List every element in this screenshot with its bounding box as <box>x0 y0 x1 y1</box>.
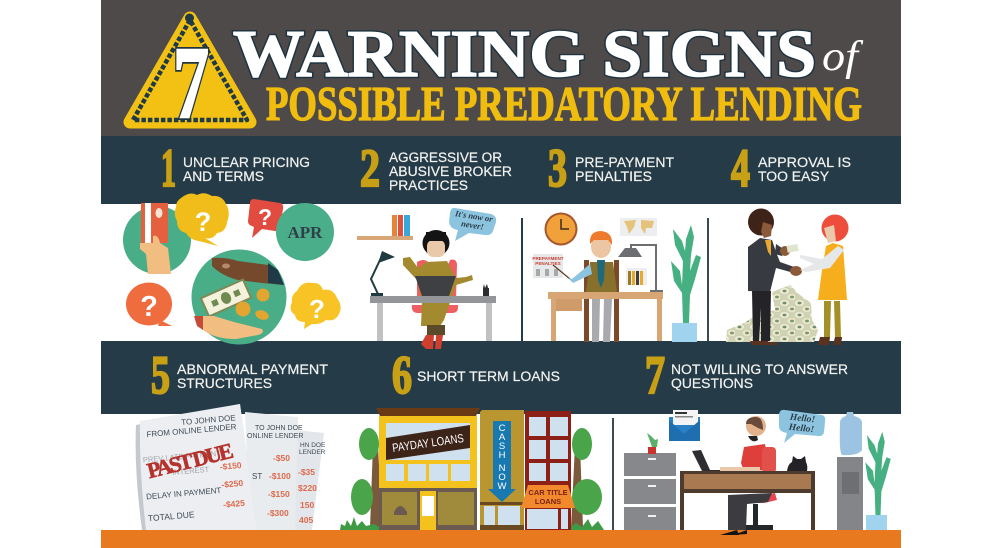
sign 6 label: SHORT TERM LOANS <box>417 369 560 384</box>
bill 1: -$150 <box>219 460 242 472</box>
icon: warning triangle with 7 <box>130 14 250 140</box>
speech bubble: hello hello <box>779 410 825 443</box>
world map <box>620 218 657 236</box>
illustration: unresponsive lender office <box>624 410 891 535</box>
bill 2: TO JOHN DOE <box>255 425 303 432</box>
bill 1: -$250 <box>221 478 244 490</box>
trees left <box>351 428 382 528</box>
sign 2 label: AGGRESSIVE OR <box>389 150 502 165</box>
icon: yellow question cloud right <box>291 283 341 329</box>
wall clock <box>544 212 578 246</box>
speech bubble: hello hello: Hello! <box>788 413 816 425</box>
water cooler <box>837 412 863 530</box>
speech bubble: it's now or never <box>449 208 496 241</box>
speech bubble: hello hello: Hello! <box>787 423 815 435</box>
sign 5 label: STRUCTURES <box>177 376 272 391</box>
divider <box>612 418 614 530</box>
grass left <box>340 517 384 530</box>
bill 1: DELAY IN PAYMENT <box>146 486 222 501</box>
laptop <box>415 276 456 296</box>
icon: cash exchange circle <box>192 250 286 344</box>
money pile <box>726 285 818 342</box>
bill 3: HN DOE <box>300 442 326 449</box>
building: cash now: N <box>499 463 506 474</box>
sign 4 number: 4 <box>731 138 750 198</box>
illustration: past due bills <box>136 404 326 530</box>
building: cash now: S <box>499 441 505 452</box>
bill 2: -$150 <box>268 489 290 499</box>
bill 2: -$300 <box>267 508 289 518</box>
man on the phone <box>720 416 776 535</box>
building: cash now <box>480 410 524 530</box>
sign 2 label: PRACTICES <box>389 178 468 193</box>
bill 1: PREV LATE PAYMENT <box>143 449 221 464</box>
penalties chart <box>532 254 564 278</box>
table lamp <box>618 245 663 292</box>
sign 2 label: ABUSIVE BROKER <box>389 164 512 179</box>
speech bubble: it's now or never: It's now or <box>454 208 494 224</box>
building: payday loans: PAYDAY LOANS <box>391 431 465 455</box>
icon: APR circle <box>276 203 334 261</box>
bill 2: ST <box>252 472 262 481</box>
building: car title loans <box>521 411 575 530</box>
illustration: aggressive broker at desk <box>357 208 496 349</box>
man in suit <box>748 208 802 345</box>
bill 3: 405 <box>299 515 313 525</box>
floor band <box>101 530 901 548</box>
bill 1: FROM ONLINE LENDER <box>146 422 237 439</box>
shelf with binders <box>357 215 413 240</box>
penalties chart: PREPAYMENT <box>532 256 564 261</box>
icon: yellow question cloud <box>175 193 229 246</box>
sign 1 number: 1 <box>161 138 176 198</box>
laptop <box>692 450 722 471</box>
sign 1 label: UNCLEAR PRICING <box>183 155 310 170</box>
sign 3 label: PENALTIES <box>575 169 652 184</box>
building: payday loans <box>376 408 480 530</box>
icon: orange question bubble: ? <box>140 291 158 323</box>
woman in yellow dress <box>800 214 848 345</box>
band: signs 1 to 4 <box>101 136 901 204</box>
sign 3 label: PRE-PAYMENT <box>575 155 674 170</box>
woman broker <box>403 230 473 349</box>
sign 2 label <box>389 150 512 193</box>
illustration: pre-payment penalties office <box>532 212 701 342</box>
building: cash now: W <box>498 481 507 492</box>
icon: yellow question cloud: ? <box>195 207 211 237</box>
small potted plant <box>647 433 658 454</box>
building: cash now: O <box>498 472 506 483</box>
man with pointer <box>568 231 619 342</box>
bill 1: -$425 <box>223 498 245 510</box>
divider <box>707 218 709 341</box>
sign 7 label: QUESTIONS <box>671 376 753 391</box>
title: of: of <box>822 34 864 80</box>
sign 1 label: AND TERMS <box>183 169 264 184</box>
bill 1 <box>136 404 257 530</box>
potted plant <box>671 225 701 342</box>
bill 3 <box>295 430 326 530</box>
sign 4 label: APPROVAL IS <box>758 155 851 170</box>
sign 7 label <box>671 362 848 391</box>
header panel <box>101 0 901 136</box>
icon: yellow question cloud right: ? <box>309 294 325 324</box>
illustration: unclear pricing <box>123 193 341 344</box>
bill 1: TO JOHN DOE <box>181 413 236 427</box>
sign 3 label <box>575 155 674 184</box>
icon: red question bubble <box>248 199 283 238</box>
office chair <box>745 493 777 530</box>
sign 3 number: 3 <box>548 138 567 198</box>
bill 3: $220 <box>298 483 317 493</box>
pen cup <box>483 284 489 296</box>
bill 3: -$35 <box>298 467 315 477</box>
building: car title loans: LOANS <box>535 497 561 506</box>
icon: hand holding credit card <box>123 203 191 274</box>
sign 6 number: 6 <box>392 345 412 405</box>
penalties chart: PENALTIES <box>535 261 561 266</box>
bookshelf frame <box>626 268 647 285</box>
icon: warning triangle with 7: 7 <box>173 26 209 140</box>
speech bubble: it's now or never: never! <box>461 218 485 232</box>
bill 3: 150 <box>300 500 314 510</box>
sign 4 label: TOO EASY <box>758 169 829 184</box>
bill 1: INTEREST <box>172 465 210 477</box>
sign 7 number: 7 <box>645 345 665 405</box>
title: warning signs: WARNING SIGNS <box>233 17 816 91</box>
filing cabinet <box>624 453 676 530</box>
icon: red question bubble: ? <box>258 204 272 230</box>
building: cash now: C <box>499 423 506 434</box>
sign 2 number: 2 <box>360 138 380 198</box>
icon: orange question bubble <box>126 282 172 326</box>
potted plant <box>865 432 891 530</box>
building: cash now: A <box>499 432 506 443</box>
bill 2 <box>245 412 303 530</box>
grass right <box>566 519 604 530</box>
band: signs 5 to 7 <box>101 341 901 414</box>
sign 7 label: NOT WILLING TO ANSWER <box>671 362 848 377</box>
illustration: payday storefronts <box>340 408 604 530</box>
sign 4 label <box>758 155 851 184</box>
divider <box>521 218 523 341</box>
title: warning signs: WARNING SIGNS <box>233 17 816 91</box>
stamp: past due: PAST DUE <box>144 438 236 483</box>
sign 5 number: 5 <box>151 345 170 405</box>
bill 2: -$50 <box>273 453 290 463</box>
sign 5 label <box>177 362 328 391</box>
email envelope icon <box>669 410 700 441</box>
illustration: approval is too easy <box>726 208 848 345</box>
icon: warning triangle with 7: 7 <box>173 26 209 140</box>
bill 3: LENDER <box>299 449 326 456</box>
telephone <box>787 456 807 471</box>
bill 1: TOTAL DUE <box>148 509 195 523</box>
desk <box>680 471 815 530</box>
building: car title loans: CAR TITLE <box>528 488 568 497</box>
chair <box>412 260 458 313</box>
building: cash now: H <box>499 450 506 461</box>
sign 1 label <box>183 155 310 184</box>
bill 2: ONLINE LENDER <box>247 433 303 440</box>
trees right <box>571 428 602 528</box>
desk lamp <box>371 251 395 294</box>
pointer stick <box>553 265 570 279</box>
bill 2: -$100 <box>269 471 291 481</box>
desk <box>370 293 496 341</box>
sign 5 label: ABNORMAL PAYMENT <box>177 362 328 377</box>
wooden desk <box>548 292 663 341</box>
icon: APR circle: APR <box>288 223 323 242</box>
